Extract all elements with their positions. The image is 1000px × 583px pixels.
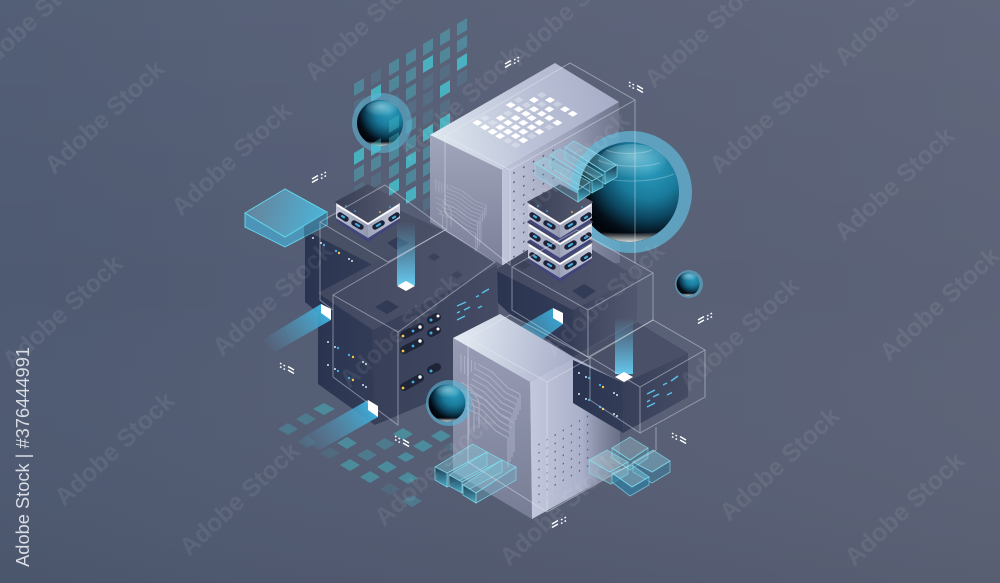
watermark: Adobe Stock bbox=[166, 97, 297, 221]
watermark: Adobe Stock bbox=[334, 269, 465, 393]
watermark: Adobe Stock bbox=[39, 55, 170, 179]
pixel display on top of cube bbox=[472, 92, 578, 148]
top small sphere bbox=[352, 93, 412, 156]
status lights bbox=[578, 372, 618, 417]
watermark: Adobe Stock bbox=[704, 55, 835, 179]
circuit traces: bottom cube bbox=[461, 354, 520, 467]
glass bars above sphere bbox=[535, 141, 617, 202]
beam from middle block bbox=[520, 308, 563, 339]
circuit traces: top cube bbox=[436, 180, 486, 252]
watermark: Adobe Stock bbox=[839, 447, 970, 571]
watermark: Adobe Stock bbox=[0, 250, 128, 374]
vertical light beam left bbox=[397, 222, 415, 291]
watermark: Adobe Stock bbox=[829, 122, 960, 246]
watermark: Adobe Stock bbox=[394, 42, 525, 166]
watermark: Adobe Stock bbox=[174, 437, 305, 561]
data dashes bbox=[647, 376, 678, 407]
data pixel grid bbox=[354, 18, 467, 212]
main dark server block bbox=[318, 228, 500, 425]
watermark: Adobe Stock bbox=[207, 237, 338, 361]
vertical light beam right bbox=[615, 317, 633, 382]
light beam bottom bbox=[298, 400, 378, 450]
server status lights: left face bbox=[327, 341, 367, 388]
light beam left bbox=[262, 304, 331, 352]
bottom sphere bbox=[426, 380, 472, 426]
server top left bbox=[336, 185, 400, 242]
server pills: right face bbox=[402, 314, 440, 389]
watermark: Adobe Stock bbox=[674, 272, 805, 396]
glass blocks lower right bbox=[589, 437, 670, 496]
watermark: Adobe Stock bbox=[539, 237, 670, 361]
wireframe cube outlines bbox=[320, 63, 705, 512]
large glass sphere bbox=[570, 131, 692, 253]
data dashes bbox=[457, 289, 489, 320]
middle dark block bbox=[495, 230, 637, 357]
lower right dark block bbox=[573, 322, 688, 433]
glass bars lower left bbox=[435, 444, 516, 503]
rear dark server block bbox=[305, 196, 447, 313]
bottom light cube bbox=[453, 314, 620, 519]
watermark: Adobe Stock bbox=[494, 447, 625, 571]
small data glyphs bbox=[280, 57, 712, 527]
server stack bbox=[528, 185, 592, 282]
watermark: Adobe Stock bbox=[714, 402, 845, 526]
right small sphere bbox=[675, 270, 703, 298]
floor data tiles bbox=[278, 403, 463, 507]
glass plate bbox=[245, 189, 327, 247]
watermark: Adobe Stock bbox=[49, 387, 180, 511]
vertical stock id text: Adobe Stock | #376444991 bbox=[12, 347, 33, 567]
watermark: Adobe Stock bbox=[504, 107, 635, 231]
top light cube bbox=[430, 63, 620, 265]
watermark: Adobe Stock bbox=[369, 407, 500, 531]
